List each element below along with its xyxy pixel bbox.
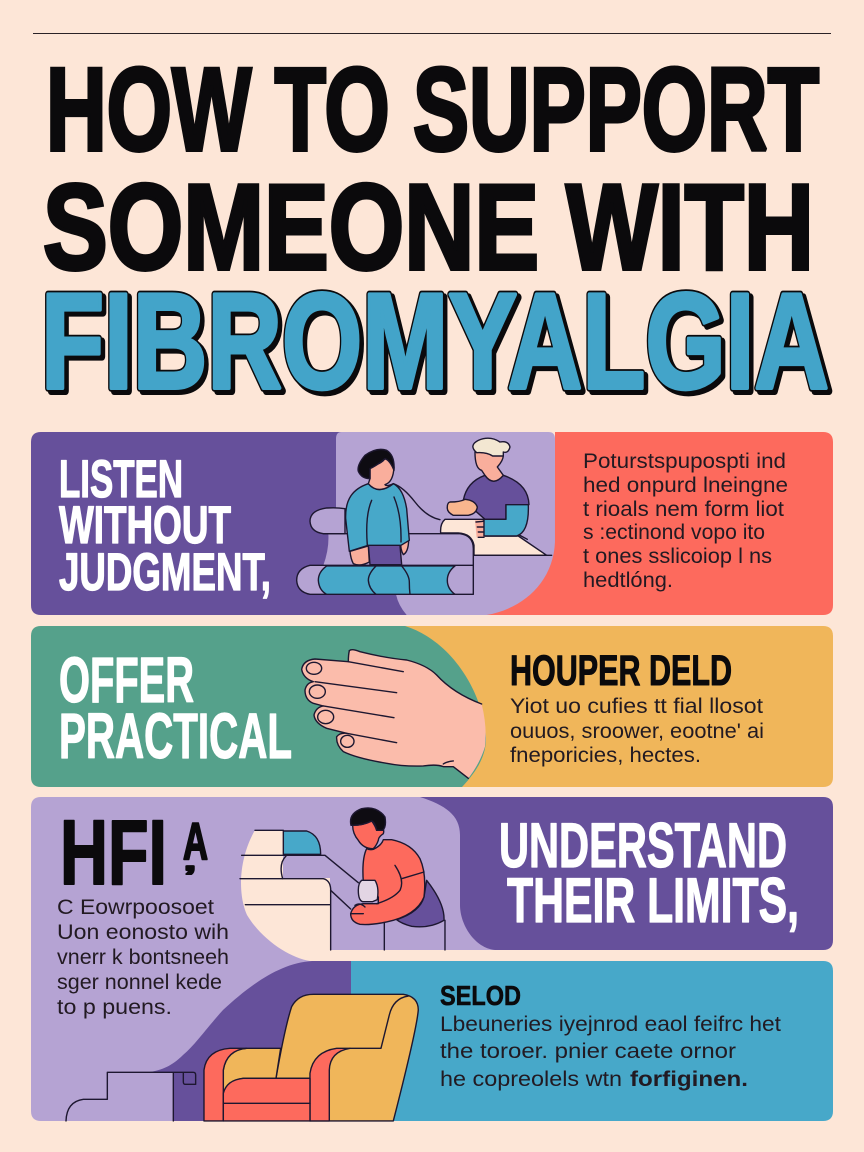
panel body text: sger nonnel kede	[57, 971, 222, 994]
black heading letters: ,	[184, 846, 196, 876]
panel body text: Poturstspupospti ind	[583, 450, 786, 473]
panel body text	[57, 896, 229, 1019]
person two	[447, 438, 529, 537]
panel body text	[440, 1013, 781, 1091]
panel: offer practical	[31, 626, 833, 787]
panel heading: LISTEN	[59, 450, 183, 509]
panel shapes	[31, 432, 833, 615]
panel body text: Yiot uo cufies tt fial llosot	[510, 695, 763, 718]
panel body text: the toroer. pnier caete ornor	[440, 1040, 736, 1063]
illustration: two people talking on a sofa	[297, 438, 552, 594]
panel body text: Lbeuneries iyejnrod eaol feifrc het	[440, 1013, 781, 1036]
icon: open hand	[302, 650, 486, 778]
panel body text: ouuos, sroower, eootne' ai	[510, 720, 764, 743]
icon: armchair and steps	[66, 994, 418, 1121]
title	[41, 44, 832, 420]
panel heading: PRACTICAL	[59, 700, 292, 772]
panel body text: t rioals nem form liot	[583, 498, 784, 521]
panel heading: OFFER	[59, 644, 194, 716]
panel shapes	[31, 626, 833, 787]
panel: understand their limits	[31, 797, 833, 1121]
panel body text	[583, 450, 788, 592]
panel heading: JUDGMENT,	[59, 543, 271, 602]
person one	[346, 449, 440, 565]
panel: selod	[66, 961, 833, 1121]
panel heading	[59, 450, 271, 602]
black heading letters: HFI	[60, 802, 167, 904]
panel body text	[510, 695, 764, 767]
black heading letters: A	[183, 813, 208, 871]
panel heading	[59, 644, 292, 772]
subheading: HOUPER DELD	[510, 647, 732, 695]
panel body text: fneporicies, hectes.	[510, 744, 701, 767]
illustration: person with cup on sofa	[240, 808, 445, 950]
panel body text: C Eowrpoosoet	[57, 896, 214, 919]
panel body text: s :ectinond vopo ito	[583, 521, 765, 544]
panel body text: hedtlóng.	[583, 569, 673, 592]
panel body text: to p puens.	[57, 996, 172, 1019]
panel body text: Uon eonosto wih	[57, 921, 229, 944]
panel: listen without judgment	[31, 432, 833, 615]
panel shapes	[150, 961, 833, 1121]
table	[441, 519, 547, 555]
panel shapes	[31, 797, 833, 1121]
panel body text: t ones sslicoiop l ns	[583, 545, 772, 568]
subheading: SELOD	[440, 980, 521, 1011]
panel body text: vnerr k bontsneeh	[57, 946, 229, 969]
panel body text: he copreolels wtn	[440, 1068, 622, 1091]
panel body text: forfiginen.	[630, 1068, 748, 1091]
panel heading	[499, 811, 799, 936]
panel body text: hed onpurd lneingne	[583, 474, 788, 497]
panel heading: WITHOUT	[59, 496, 231, 555]
